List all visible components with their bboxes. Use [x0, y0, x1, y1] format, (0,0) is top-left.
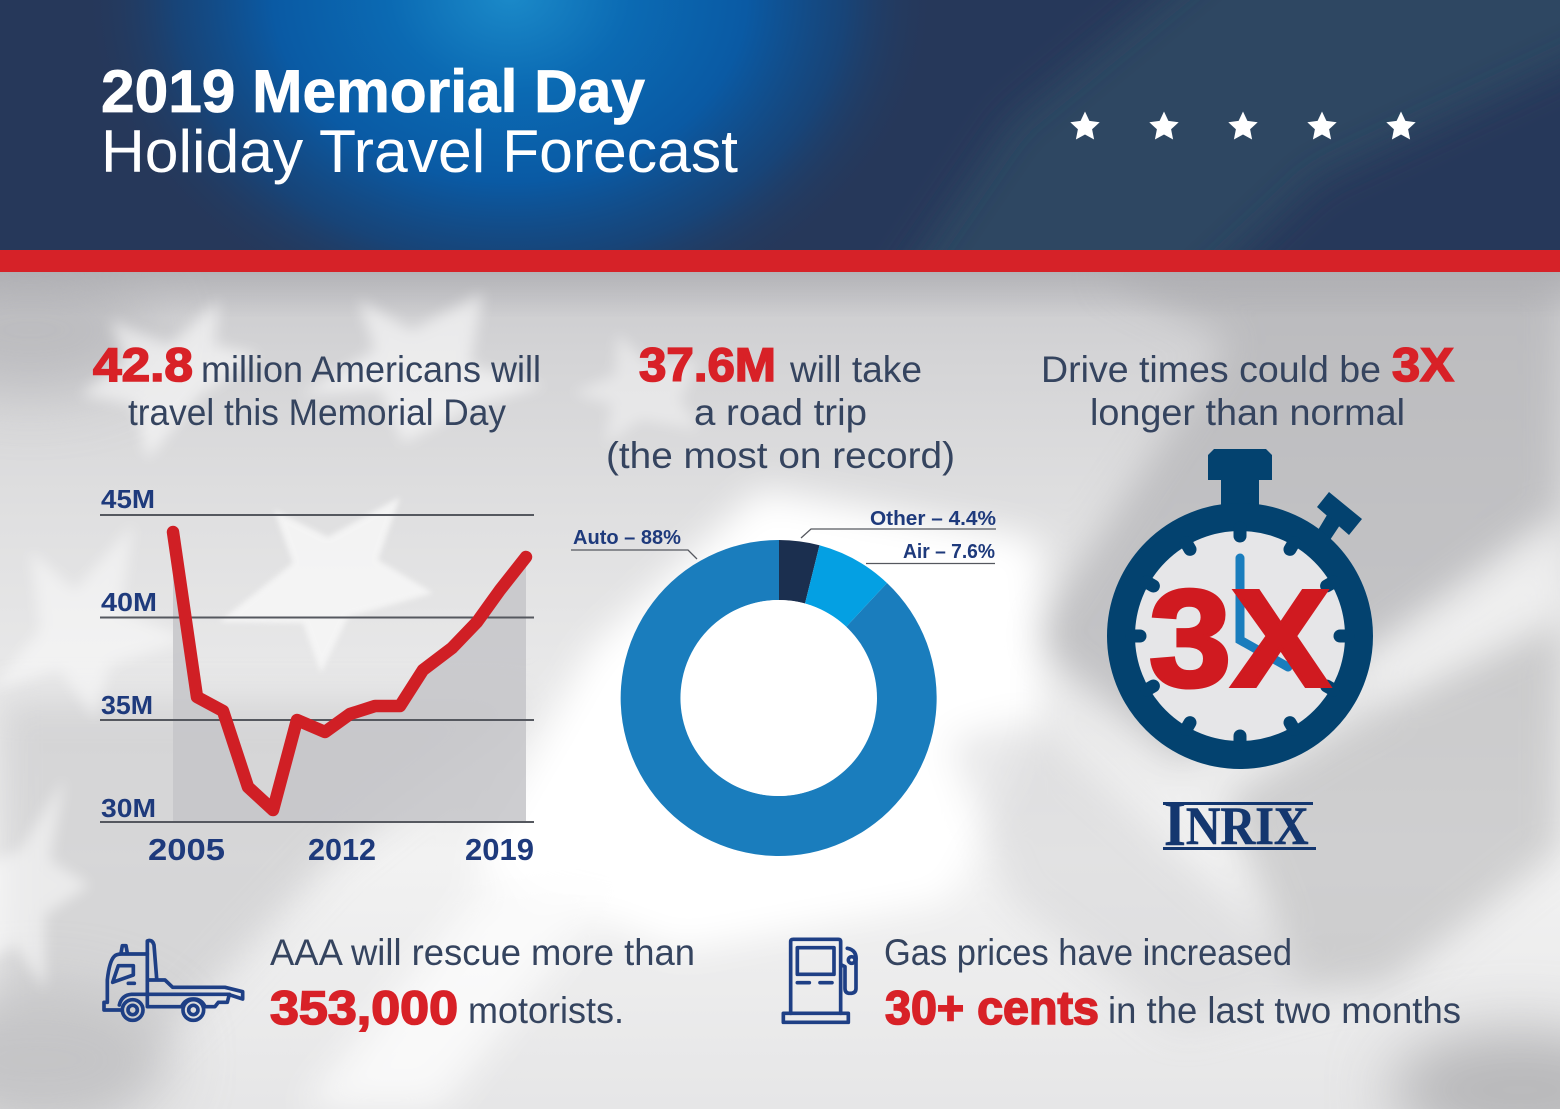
icon: tow truck: [104, 940, 243, 1020]
face and ring: [1121, 517, 1359, 755]
x-axis year labels: [148, 832, 534, 867]
header stars: [1070, 112, 1416, 140]
heading: 37.6M road trip: will take: [789, 349, 922, 390]
title: 2019 Memorial Day: [101, 58, 646, 125]
header banner: [0, 0, 1560, 250]
logo: INRIX: NRIX: [1186, 796, 1309, 857]
heading: 42.8 million travelers: [93, 338, 541, 433]
title: Holiday Travel Forecast: [101, 118, 738, 185]
icon: stopwatch: [1121, 449, 1362, 755]
side button: [1317, 492, 1362, 540]
page background: [0, 270, 1560, 1109]
callout: gas prices: in the last two months: [1108, 990, 1461, 1031]
crown: [1208, 449, 1272, 510]
line chart: travelers 2005-2019: [100, 484, 534, 867]
label: other: [801, 508, 996, 538]
red divider band: [0, 250, 1560, 272]
logo: INRIX: I: [1164, 789, 1186, 859]
trend line: [173, 532, 526, 810]
donut chart: mode of travel: [571, 508, 996, 856]
heading: 37.6M road trip: [606, 338, 955, 476]
logo: INRIX: [1163, 789, 1316, 859]
y-axis gridlines and labels: 30M: [101, 793, 156, 823]
y-axis gridlines and labels: 35M: [101, 690, 153, 720]
y-axis gridlines and labels: 40M: [101, 587, 157, 617]
heading: 37.6M road trip: (the most on record): [606, 435, 955, 476]
chart area fill: [173, 532, 526, 822]
heading: 37.6M road trip: 37.6M: [639, 338, 776, 391]
label: other: Other – 4.4%: [870, 508, 996, 530]
y-axis gridlines and labels: [100, 484, 534, 823]
segment: auto 88%: [621, 540, 937, 856]
3X label: 3X: [1149, 562, 1330, 716]
heading: drive times: [1041, 338, 1454, 433]
heading: 37.6M road trip: a road trip: [694, 392, 867, 433]
icon: gas pump: [783, 939, 856, 1022]
x-axis year labels: 2012: [308, 832, 376, 867]
callout: gas prices: [884, 932, 1461, 1034]
heading: drive times: longer than normal: [1090, 392, 1405, 433]
heading: drive times: 3X: [1392, 338, 1454, 391]
callout: gas prices: 30+ cents: [885, 981, 1099, 1034]
clock hand: [1240, 558, 1288, 667]
tick marks: [1132, 528, 1348, 744]
callout: gas prices: Gas prices have increased: [884, 932, 1292, 973]
label: air: Air – 7.6%: [903, 541, 995, 563]
callout: AAA rescues: AAA will rescue more than: [270, 932, 695, 973]
segment: other 4.4%: [779, 540, 820, 604]
callout: AAA rescues: [270, 932, 695, 1034]
heading: 42.8 million travelers: million Americans will: [201, 349, 541, 390]
heading: 42.8 million travelers: travel this Memorial Day: [128, 392, 506, 433]
donut hole: [681, 600, 877, 796]
title: [101, 58, 738, 185]
heading: drive times: Drive times could be: [1041, 349, 1381, 390]
callout: AAA rescues: motorists.: [468, 990, 624, 1031]
label: auto: [571, 527, 697, 559]
y-axis gridlines and labels: 45M: [101, 484, 155, 514]
x-axis year labels: 2005: [148, 832, 225, 867]
label: auto: Auto – 88%: [573, 527, 681, 549]
heading: 42.8 million travelers: 42.8: [93, 338, 193, 391]
x-axis year labels: 2019: [465, 832, 534, 867]
label: air: [866, 541, 995, 564]
callout: AAA rescues: 353,000: [270, 981, 458, 1034]
segment: air 7.6%: [805, 545, 887, 627]
